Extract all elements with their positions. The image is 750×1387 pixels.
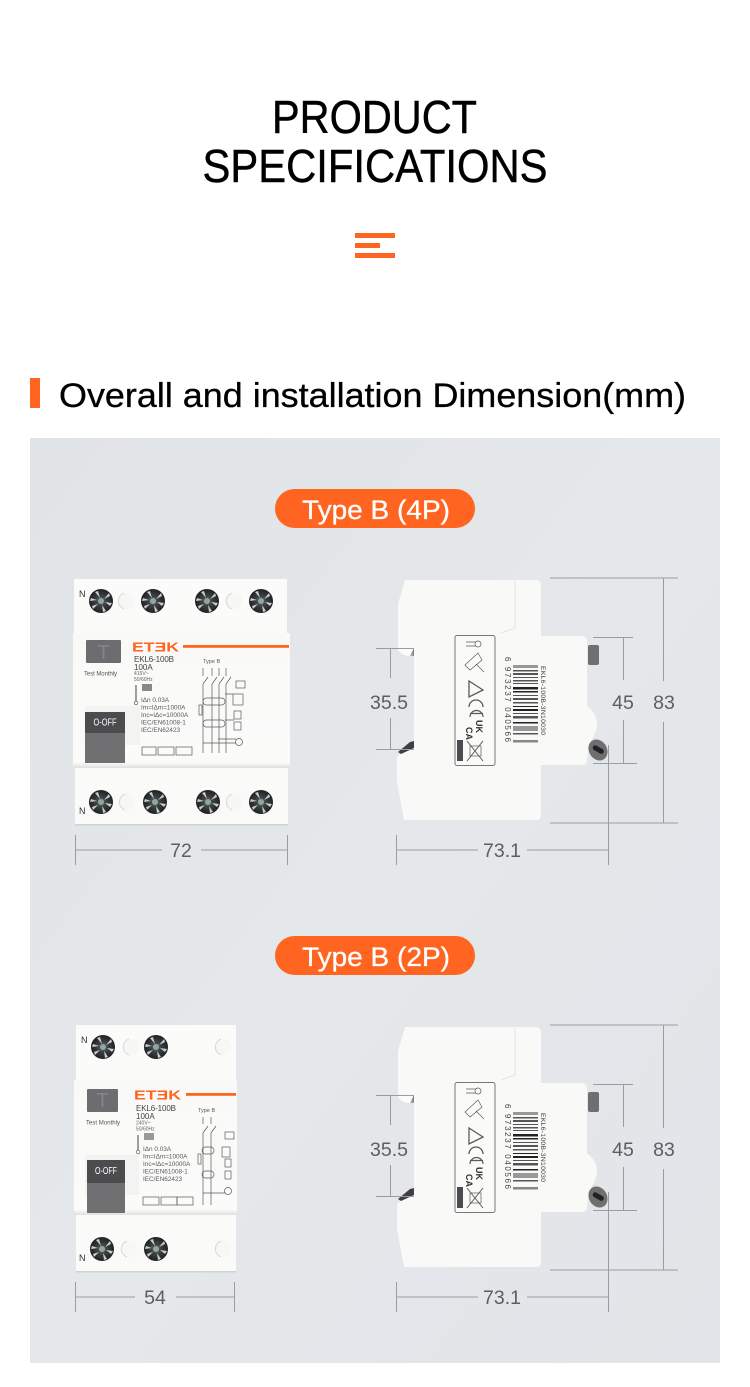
side view: 4P breaker: 6 973237 040566 — [503, 657, 512, 743]
dimensions: 4P side view: 45 — [612, 692, 634, 714]
side view: 2P breaker — [397, 1027, 611, 1267]
front view: 4P breaker: ETƎK — [132, 640, 180, 654]
panel: dimensions — [30, 438, 720, 1363]
front view: 2P breaker: EKL6-100B — [136, 1104, 176, 1113]
title — [202, 91, 548, 192]
front view: 2P breaker: N — [79, 1253, 86, 1263]
side view: 4P breaker: EKL6-100B-3N10030 — [539, 666, 546, 735]
front view: 4P breaker — [73, 579, 290, 826]
front view: 2P breaker: Test Monthly — [86, 1120, 120, 1126]
side view: 4P breaker: CA — [464, 727, 474, 740]
front view: 2P breaker — [74, 1025, 237, 1272]
dimensions: 2P side view: 73.1 — [483, 1287, 521, 1309]
front view: 2P breaker: IΔn 0.03A — [143, 1146, 172, 1153]
front view: 4P breaker: 50/60Hz — [134, 677, 153, 683]
side view: 2P breaker: 6 973237 040566 — [503, 1104, 512, 1190]
dimensions: 4P side view: 83 — [653, 692, 675, 714]
title: PRODUCT — [272, 91, 477, 143]
front view: 4P breaker: IΔn 0.03A — [141, 697, 170, 704]
dimensions: 4P side view — [370, 578, 678, 865]
dimension: width 54: 54 — [144, 1287, 166, 1309]
dimension: width 72: 72 — [170, 840, 192, 862]
front view: 4P breaker: IEC/EN62423 — [141, 727, 181, 734]
front view: 2P breaker: T — [96, 1090, 109, 1112]
dimension: width 54 — [76, 1282, 234, 1312]
front view: 2P breaker: IEC/EN62423 — [143, 1176, 183, 1183]
front view: 2P breaker: Inc=IΔc=10000A — [143, 1161, 191, 1168]
dimension: width 72 — [76, 835, 288, 865]
title: SPECIFICATIONS — [202, 140, 548, 192]
badge: Type B (2P): Type B (2P) — [302, 942, 450, 972]
section heading: Overall and installation Dimension(mm) — [59, 377, 686, 415]
front view: 4P breaker: Type B — [203, 659, 220, 665]
front view: 4P breaker: 100A — [134, 663, 153, 672]
dimensions: 4P side view: 73.1 — [483, 840, 521, 862]
front view: 4P breaker: EKL6-100B — [134, 655, 174, 664]
dimensions: 4P side view: 35.5 — [370, 692, 408, 714]
icon: orange menu mark — [355, 233, 395, 258]
front view: 4P breaker: 415V~ — [134, 671, 149, 677]
front view: 2P breaker: 100A — [136, 1112, 155, 1121]
front view: 2P breaker: Im=IΔm=1000A — [143, 1154, 188, 1160]
front view: 2P breaker: Type B — [198, 1108, 215, 1114]
side view: 4P breaker: UK — [474, 720, 484, 733]
dimensions: 2P side view: 35.5 — [370, 1139, 408, 1161]
side view: 2P breaker: EKL6-100B-3N10030 — [539, 1113, 546, 1182]
side view: 2P breaker: CA — [464, 1174, 474, 1187]
side view: 4P breaker — [397, 580, 611, 820]
badge: Type B (2P) — [275, 936, 475, 975]
front view: 2P breaker: IEC/EN61008-1 — [143, 1168, 188, 1176]
badge: Type B (4P) — [275, 489, 475, 528]
front view: 4P breaker: O-OFF — [94, 718, 116, 728]
dimensions: 2P side view: 83 — [653, 1139, 675, 1161]
front view: 4P breaker: N — [79, 806, 86, 816]
front view: 4P breaker: Im=IΔm=1000A — [141, 704, 186, 712]
front view: 2P breaker: N — [81, 1035, 88, 1045]
front view: 4P breaker: IEC/EN61008-1 — [141, 720, 186, 726]
dimensions: 2P side view — [370, 1025, 678, 1312]
dimensions: 2P side view: 45 — [612, 1139, 634, 1161]
side view: 2P breaker: UK — [474, 1167, 484, 1180]
front view: 2P breaker: ETƎK — [134, 1088, 182, 1102]
front view: 4P breaker: T — [97, 642, 110, 664]
front view: 4P breaker: N — [79, 589, 86, 599]
front view: 4P breaker: Inc=IΔc=10000A — [141, 712, 189, 719]
front view: 4P breaker: Test Monthly — [84, 672, 117, 678]
front view: 2P breaker: O-OFF — [95, 1166, 117, 1177]
badge: Type B (4P): Type B (4P) — [302, 495, 450, 525]
front view: 2P breaker: 240V~ — [136, 1120, 151, 1126]
front view: 2P breaker: 50/60Hz — [136, 1126, 155, 1132]
